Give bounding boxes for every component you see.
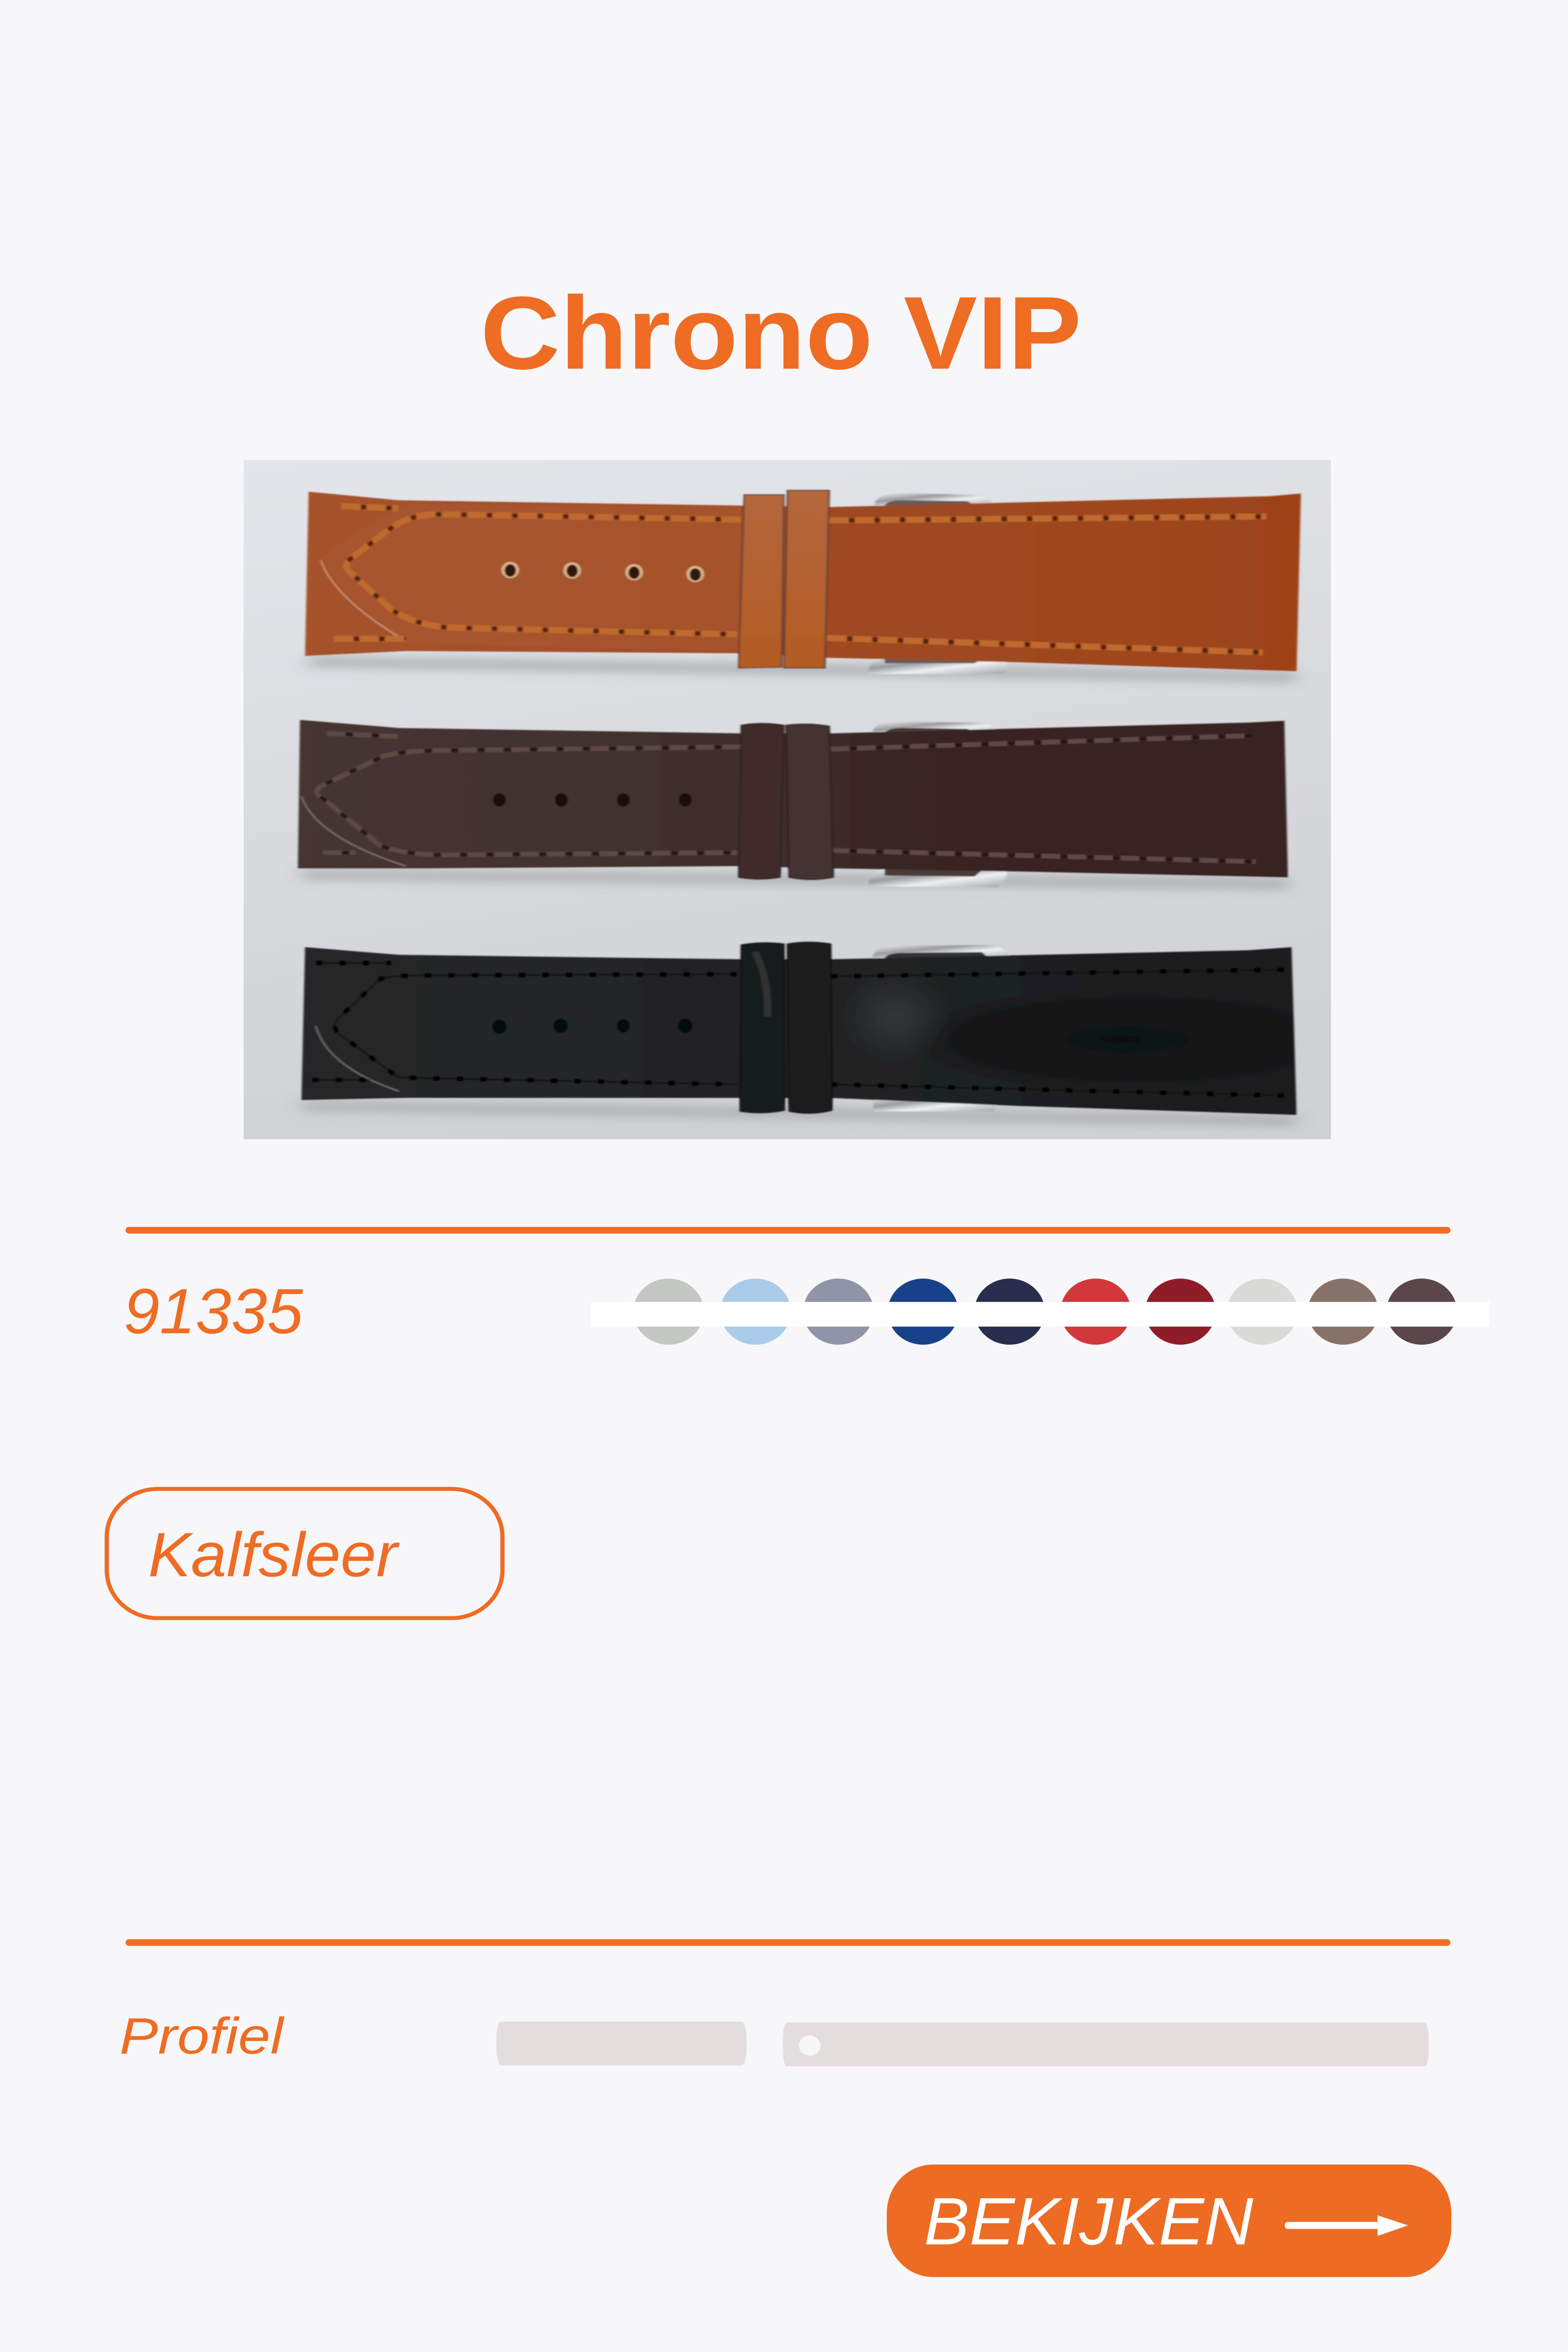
profile label: Profiel — [119, 2007, 285, 2064]
strap: tan leather — [305, 490, 1301, 681]
strap: dark brown leather — [298, 720, 1288, 888]
top divider — [126, 1227, 1450, 1233]
strap: black leather — [302, 942, 1335, 1125]
article number: 91335 — [124, 1275, 303, 1347]
icon: arrow — [1285, 2215, 1408, 2236]
profile bar: long — [783, 2023, 1429, 2066]
bottom divider — [126, 1939, 1450, 1946]
button — [887, 2165, 1451, 2277]
product photo: three leather watch straps — [244, 460, 1335, 1139]
material tag: Kalfsleer — [148, 1520, 400, 1590]
material tag — [107, 1489, 502, 1618]
colour swatches — [633, 1279, 1457, 1345]
profile bar: short — [496, 2022, 747, 2066]
white band over swatches — [591, 1302, 1490, 1327]
button: BEKIJKEN — [924, 2185, 1254, 2259]
title: Chrono VIP — [480, 276, 1082, 391]
